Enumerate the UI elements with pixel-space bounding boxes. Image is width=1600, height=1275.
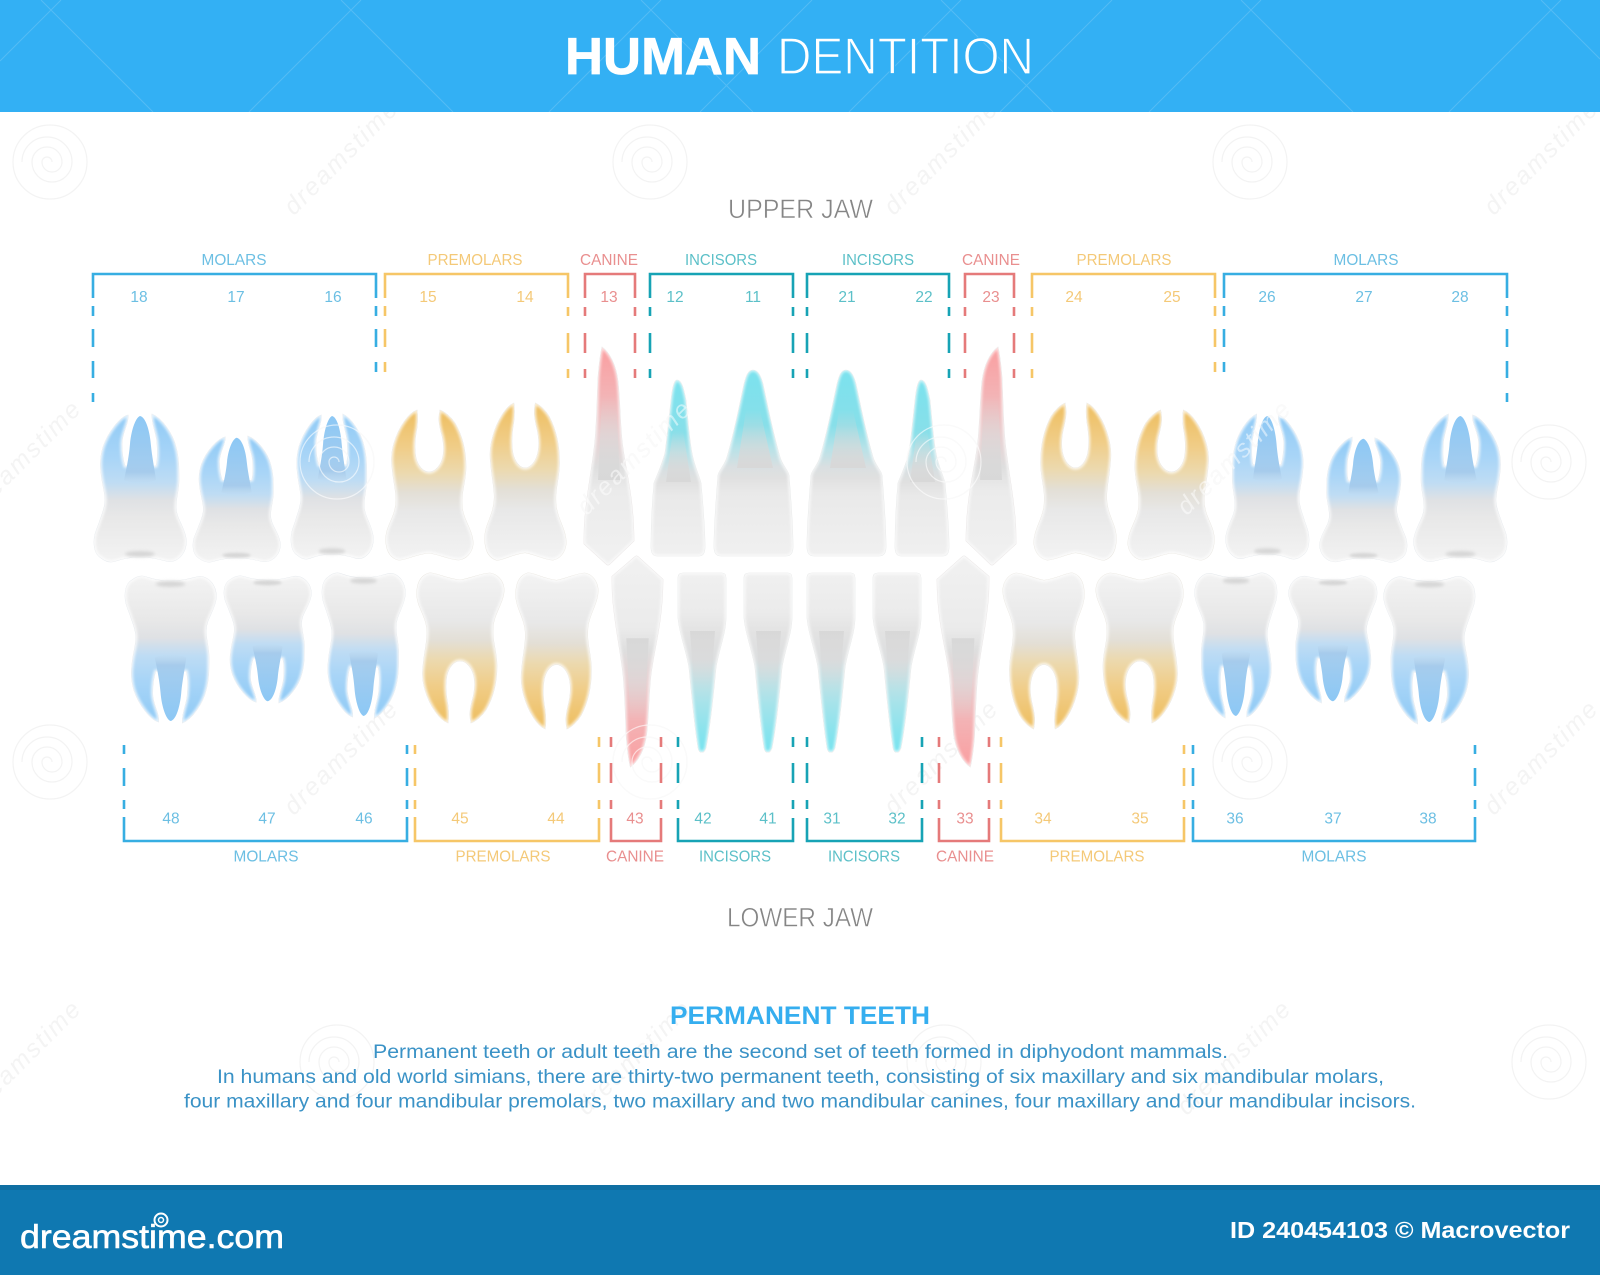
bracket: lower left canine 33: 33: [956, 810, 974, 828]
watermark layer behind content: dreamstime: [571, 394, 697, 520]
bracket: upper left molars 26-28: 26: [1258, 289, 1276, 306]
watermark layer behind content: dreamstime: [571, 994, 697, 1120]
tooth 16 molar: [291, 414, 373, 559]
bracket: upper right premolars 15-14: 14: [516, 289, 534, 306]
bracket: upper right premolars 15-14: 15: [419, 289, 437, 306]
watermark layer behind content: dreamstime: [1171, 394, 1297, 520]
bracket: upper left molars 26-28: MOLARS: [1334, 252, 1398, 269]
tooth 38 molar: [1384, 576, 1475, 724]
bracket: upper left premolars 24-25: PREMOLARS: [1076, 252, 1172, 269]
watermark layer behind content: dreamstime: [1171, 994, 1297, 1120]
bracket: upper right molars 18-16: 18: [130, 289, 148, 306]
tooth 21 incisor: [807, 370, 886, 556]
bracket: lower right incisors 42-41: INCISORS: [699, 848, 771, 866]
tooth 26 molar: [1226, 414, 1309, 559]
tooth 25 premolar: [1128, 410, 1214, 560]
bracket: lower left incisors 31-32: INCISORS: [828, 848, 900, 866]
bracket: lower right molars 48-46: 46: [355, 810, 373, 828]
tooth 23 canine: [966, 347, 1016, 565]
bracket: upper right canine 13: CANINE: [580, 252, 638, 269]
bracket: upper left premolars 24-25: [1032, 252, 1215, 378]
footer logo: dreamstime.com: [20, 1218, 284, 1255]
footer bar: [0, 1185, 1600, 1275]
subheading: PERMANENT TEETH: [670, 1002, 930, 1030]
watermark overlay on teeth: [300, 394, 1297, 799]
tooth 46 molar: [322, 573, 405, 718]
bracket: lower right incisors 42-41: 42: [694, 810, 712, 828]
lower jaw brackets and labels: [124, 737, 1475, 866]
bracket: upper right molars 18-16: 16: [324, 289, 342, 306]
bracket: upper left incisors 21-22: 21: [838, 289, 856, 306]
bracket: upper left premolars 24-25: 24: [1065, 289, 1083, 306]
tooth 22 incisor: [895, 380, 949, 556]
tooth 24 premolar: [1034, 403, 1116, 560]
title: DENTITION: [777, 28, 1034, 86]
tooth 41 incisor: [744, 573, 792, 752]
watermark overlay on teeth: dreamstime: [1171, 394, 1297, 520]
bracket: lower left premolars 34-35: 34: [1034, 810, 1052, 828]
bracket: upper right incisors 12-11: [650, 252, 793, 378]
description: four maxillary and four mandibular premolars, two maxillary and two mandibular canines, four maxillary and four mandibular incisors.: [184, 1092, 1416, 1112]
tooth 17 molar: [193, 436, 280, 562]
footer credit: ID 240454103 © Macrovector: [1230, 1217, 1570, 1243]
tooth 47 molar: [224, 576, 311, 703]
bracket: lower right premolars 45-44: PREMOLARS: [456, 848, 550, 866]
bracket: upper right incisors 12-11: INCISORS: [685, 252, 757, 269]
tooth 45 premolar: [417, 573, 504, 723]
bracket: lower right molars 48-46: MOLARS: [234, 848, 298, 866]
description: In humans and old world simians, there are thirty-two permanent teeth, consisting of six maxillary and six mandibular molars,: [217, 1067, 1384, 1088]
bracket: lower right molars 48-46: 48: [162, 810, 180, 828]
bracket: upper left canine 23: [962, 252, 1020, 378]
bracket: upper right molars 18-16: 17: [227, 289, 245, 306]
tooth 36 molar: [1195, 573, 1277, 718]
bracket: lower right premolars 45-44: 44: [547, 810, 565, 828]
tooth 44 premolar: [516, 573, 598, 729]
bracket: lower right molars 48-46: [124, 745, 407, 866]
bracket: upper left molars 26-28: [1224, 252, 1507, 402]
bracket: lower right canine 43: 43: [626, 810, 644, 828]
bracket: upper left molars 26-28: 27: [1355, 289, 1373, 306]
tooth 14 premolar: [485, 403, 566, 560]
bracket: lower left molars 36-38: 36: [1226, 810, 1244, 828]
bracket: lower left molars 36-38: MOLARS: [1302, 848, 1366, 866]
bracket: lower left incisors 31-32: 31: [823, 810, 841, 828]
description: [184, 1042, 1416, 1112]
bracket: upper right incisors 12-11: 12: [666, 289, 684, 306]
tooth 34 premolar: [1003, 573, 1084, 729]
bracket: lower left incisors 31-32: 32: [888, 810, 906, 828]
bracket: upper left incisors 21-22: 22: [915, 289, 933, 306]
bracket: upper left canine 23: CANINE: [962, 252, 1020, 269]
tooth 31 incisor: [807, 573, 855, 752]
bracket: lower right incisors 42-41: 41: [759, 810, 777, 828]
bracket: lower left molars 36-38: 38: [1419, 810, 1437, 828]
tooth 28 molar: [1414, 414, 1507, 562]
heading: lower jaw: LOWER JAW: [727, 902, 873, 932]
watermark layer behind content: dreamstime: [278, 694, 404, 820]
bracket: upper left molars 26-28: 28: [1451, 289, 1469, 306]
bracket: lower left canine 33: CANINE: [936, 848, 994, 866]
bracket: lower right premolars 45-44: [415, 737, 599, 866]
tooth 27 molar: [1320, 437, 1407, 562]
tooth 33 canine: [937, 556, 989, 767]
bracket: upper right premolars 15-14: PREMOLARS: [428, 252, 522, 269]
upper jaw brackets and labels: [93, 252, 1507, 402]
tooth 12 incisor: [651, 380, 705, 556]
tooth 13 canine: [584, 347, 634, 565]
bracket: lower left premolars 34-35: PREMOLARS: [1050, 848, 1144, 866]
watermark layer behind content: dreamstime: [278, 94, 404, 220]
bracket: upper right molars 18-16: [93, 252, 376, 402]
title: HUMAN: [565, 28, 761, 86]
bracket: upper right incisors 12-11: 11: [745, 289, 761, 306]
text block: permanent teeth: [184, 1002, 1416, 1112]
bracket: lower right canine 43: [606, 737, 664, 866]
tooth 15 premolar: [386, 410, 473, 560]
tooth 37 molar: [1289, 576, 1377, 703]
tooth 48 molar: [125, 576, 216, 723]
bracket: upper left incisors 21-22: INCISORS: [842, 252, 914, 269]
tooth 11 incisor: [714, 370, 793, 556]
watermark layer behind content: dreamstime: [878, 694, 1004, 820]
header banner: [0, 0, 1600, 112]
bracket: lower left molars 36-38: 37: [1324, 810, 1342, 828]
tooth 32 incisor: [873, 573, 921, 752]
bracket: upper right canine 13: [580, 252, 638, 378]
bracket: lower left premolars 34-35: 35: [1131, 810, 1149, 828]
tooth 35 premolar: [1096, 573, 1183, 723]
tooth 43 canine: [612, 556, 663, 767]
tooth 18 molar: [94, 414, 186, 562]
bracket: upper left incisors 21-22: [807, 252, 949, 378]
heading: upper jaw: UPPER JAW: [728, 194, 873, 224]
title: [565, 28, 1034, 86]
bracket: lower right incisors 42-41: [678, 737, 793, 866]
bracket: lower right molars 48-46: 47: [258, 810, 276, 828]
bracket: upper right premolars 15-14: [385, 252, 568, 378]
bracket: upper left premolars 24-25: 25: [1163, 289, 1181, 306]
bracket: lower right premolars 45-44: 45: [451, 810, 469, 828]
upper teeth row: [94, 347, 1507, 565]
watermark overlay on teeth: dreamstime: [571, 394, 697, 520]
tooth 42 incisor: [678, 573, 726, 752]
bracket: upper right molars 18-16: MOLARS: [202, 252, 266, 269]
bracket: lower left canine 33: [936, 737, 994, 866]
description: Permanent teeth or adult teeth are the second set of teeth formed in diphyodont mammals.: [373, 1042, 1228, 1063]
bracket: lower left premolars 34-35: [1001, 737, 1184, 866]
bracket: lower right canine 43: CANINE: [606, 848, 664, 866]
bracket: lower left incisors 31-32: [807, 737, 922, 866]
watermark layer behind content: dreamstime: [878, 94, 1004, 220]
bracket: upper right canine 13: 13: [600, 289, 618, 306]
bracket: lower left molars 36-38: [1193, 745, 1475, 866]
bracket: upper left canine 23: 23: [982, 289, 1000, 306]
lower teeth row: [125, 556, 1475, 767]
